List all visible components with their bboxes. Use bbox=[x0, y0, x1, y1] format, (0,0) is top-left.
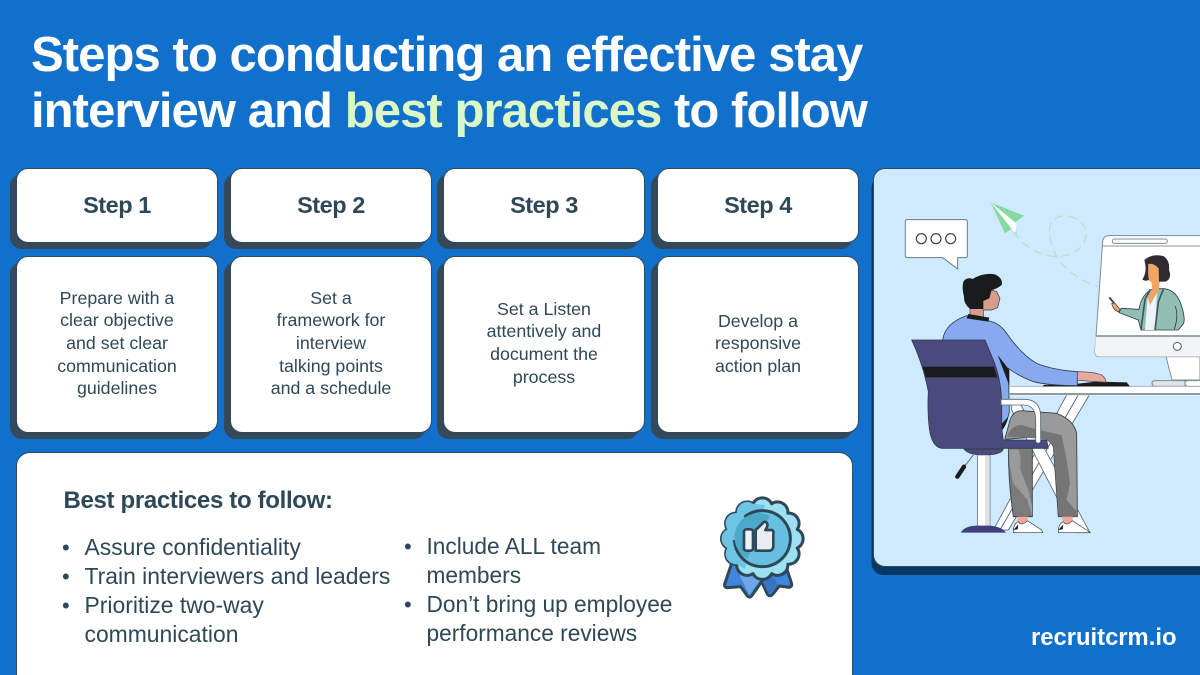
heading: best practices: Best practices to follow: bbox=[64, 486, 333, 514]
panel: step 1 header bbox=[16, 168, 218, 243]
list: right column bbox=[404, 532, 672, 646]
panel: step 3 description bbox=[443, 256, 645, 433]
rosette bbox=[721, 497, 803, 579]
panel: step 1 description: clear objective bbox=[60, 310, 174, 330]
panel: step 1 header: Step 1 bbox=[83, 192, 151, 218]
panel: step 3 header bbox=[443, 168, 645, 243]
panel: step 2 description: Set a bbox=[310, 288, 352, 308]
figure: man seated, torso and head bbox=[943, 274, 1106, 432]
panel: step 4 description: action plan bbox=[715, 356, 801, 376]
panel: step 2 header: Step 2 bbox=[297, 192, 365, 218]
panel: step 3 header: Step 3 bbox=[510, 192, 578, 218]
panel: step 4 header bbox=[657, 168, 859, 243]
ribbon bbox=[724, 563, 791, 597]
brand name: recruitcrm.io bbox=[1031, 624, 1176, 651]
list: left column: • bbox=[62, 592, 70, 618]
panel: step 2 description bbox=[230, 256, 432, 433]
panel: step 1 description: Prepare with a bbox=[60, 288, 174, 308]
list: right column: • bbox=[404, 534, 412, 558]
panel: step 4 header: Step 4 bbox=[724, 192, 792, 218]
panel: step 1 description bbox=[16, 256, 218, 433]
panel: step 2 description: talking points bbox=[279, 356, 383, 376]
panel: step 1 description: communication bbox=[57, 356, 177, 376]
panel: step 3 description: attentively and bbox=[487, 321, 601, 341]
illustration: video call scene bbox=[904, 202, 1200, 534]
title: Steps to conducting an effective stay bbox=[31, 28, 862, 82]
panel: illustration bbox=[872, 168, 1200, 567]
icon: speech bubble bbox=[905, 220, 967, 269]
list: left column: • bbox=[62, 564, 70, 588]
desk top bbox=[1010, 386, 1200, 395]
office chair bbox=[912, 340, 1048, 533]
title: interview and best practices to follow bbox=[31, 84, 867, 138]
panel: step 4 description bbox=[657, 256, 859, 433]
panel: step 3 description: process bbox=[513, 367, 575, 387]
list: left column: Assure confidentiality bbox=[84, 534, 301, 560]
list: right column: Don’t bring up employee bbox=[426, 590, 672, 616]
thumb bbox=[744, 529, 752, 550]
panel: step 3 description: document the bbox=[490, 344, 598, 364]
monitor bbox=[1095, 236, 1200, 386]
title bbox=[31, 28, 868, 138]
keyboard bbox=[1043, 382, 1130, 386]
list: right column: • bbox=[404, 592, 412, 616]
list: left column: • bbox=[62, 534, 70, 560]
list: right column: performance reviews bbox=[426, 620, 637, 646]
desk legs bbox=[993, 395, 1090, 533]
panel: step 1 description: guidelines bbox=[77, 378, 157, 398]
panel: best practices bbox=[16, 452, 853, 675]
panel: step 1 description: and set clear bbox=[66, 333, 168, 353]
list: left column bbox=[62, 534, 390, 646]
panel: step 2 description: and a schedule bbox=[271, 378, 391, 398]
list: left column: Train interviewers and leaders bbox=[84, 562, 390, 588]
list: left column: communication bbox=[84, 620, 238, 646]
list: right column: Include ALL team bbox=[426, 532, 601, 558]
list: left column: Prioritize two-way bbox=[84, 592, 264, 618]
list: right column: members bbox=[426, 562, 521, 588]
panel: step 4 description: responsive bbox=[715, 333, 801, 353]
figure: woman on screen bbox=[1109, 255, 1184, 330]
panel: step 2 description: framework for bbox=[277, 310, 385, 330]
figure: man seated, legs bbox=[1005, 411, 1090, 533]
icon: paper plane with dashed trail bbox=[991, 202, 1098, 287]
panel: step 3 description: Set a Listen bbox=[497, 298, 591, 318]
icon: award badge with thumbs up bbox=[720, 496, 805, 599]
panel: step 2 description: interview bbox=[296, 333, 366, 353]
panel: step 4 description: Develop a bbox=[718, 310, 798, 330]
panel: step 2 header bbox=[230, 168, 432, 243]
